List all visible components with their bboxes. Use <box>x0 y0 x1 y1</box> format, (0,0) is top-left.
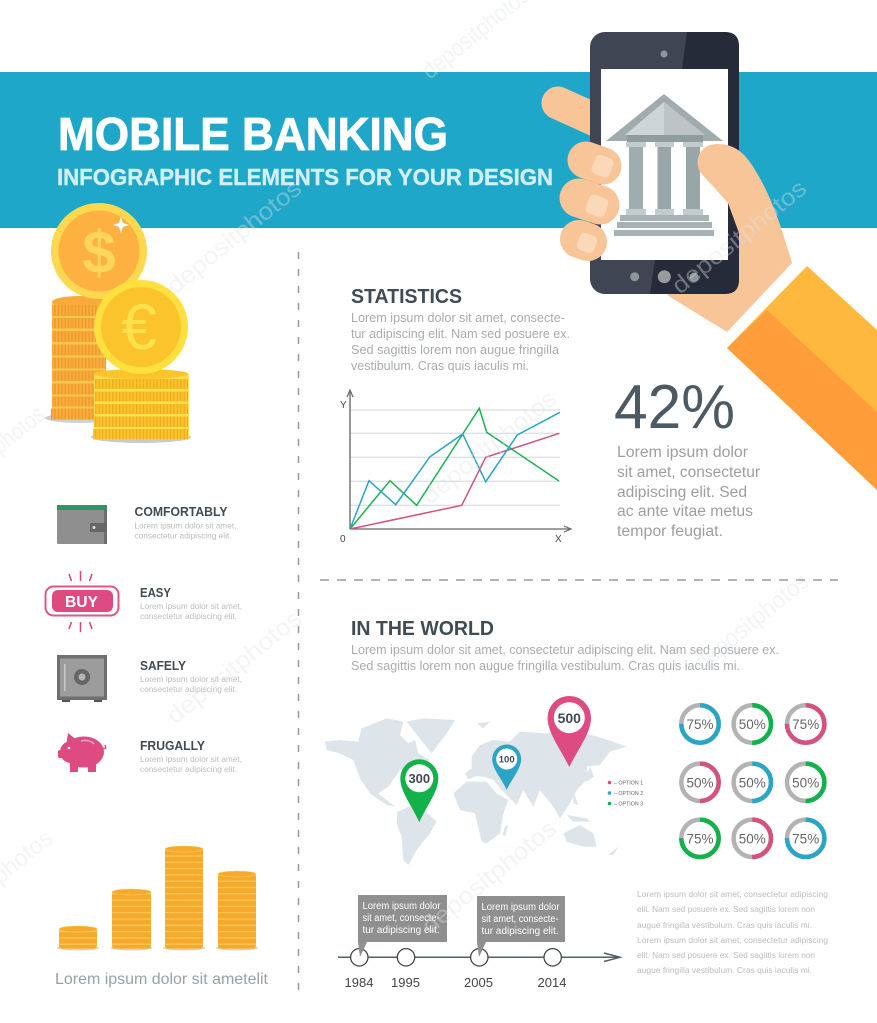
subtitle: INFOGRAPHIC ELEMENTS FOR YOUR DESIGN <box>57 164 553 190</box>
donut: 50% green: 50% <box>739 717 766 732</box>
map pin: 100 <box>492 744 521 790</box>
timeline years: 2014 <box>538 975 566 990</box>
big stat: 42%: sit amet, consectetur <box>617 464 760 481</box>
icon: euro coin <box>94 280 188 374</box>
map pin: 500 <box>548 696 591 767</box>
feature: frugally: FRUGALLY <box>140 738 205 753</box>
divider: vertical <box>298 252 300 992</box>
donut: 75% blue second: 75% <box>792 831 819 846</box>
phone <box>590 32 739 294</box>
icon: coin stacks with dollar and euro <box>45 203 191 443</box>
right text block <box>637 889 828 975</box>
feature: frugally: consectetur adipiscing elit. <box>140 764 237 774</box>
line chart: 0 <box>340 534 346 545</box>
divider: horizontal <box>320 579 838 581</box>
donut: 50% blue <box>734 764 771 801</box>
panel: in the world text <box>351 618 779 673</box>
icon: wallet <box>57 505 107 544</box>
donut: 50% green <box>734 705 771 743</box>
icon: euro coin: € <box>121 291 157 363</box>
big stat: 42% <box>614 373 760 540</box>
line chart: Y <box>340 400 347 411</box>
watermarks: depositphotos <box>162 605 307 730</box>
timeline years: 1995 <box>391 975 420 990</box>
header banner <box>0 72 877 228</box>
feature: frugally <box>58 733 242 774</box>
map legend: – OPTION 3 <box>614 802 643 808</box>
map legend: – OPTION 2 <box>614 791 643 797</box>
icon: dollar coin <box>51 203 147 299</box>
coin bar chart <box>55 846 269 988</box>
icon: thumb and fingers <box>575 144 775 255</box>
feature: safely: Lorem ipsum dolor sit amet, <box>140 674 242 684</box>
donut: 75% pink: 75% <box>792 717 819 732</box>
map legend: – OPTION 1 <box>614 780 643 786</box>
icon: buy button: BUY <box>65 594 98 611</box>
feature: easy <box>46 571 242 632</box>
chart caption: Lorem ipsum dolor sit ametelit <box>55 971 269 988</box>
timeline years <box>345 975 566 990</box>
feature: safely: consectetur adipiscing elit. <box>140 684 237 694</box>
feature: comfortably: consectetur adipiscing elit. <box>134 530 232 540</box>
right text block: elit. Nam sed posuere ex. Sed sagittis lorem non <box>637 904 815 914</box>
timeline callout: second: sit amet, consecte- <box>482 914 558 925</box>
feature: easy: consectetur adipiscing elit. <box>140 611 237 621</box>
feature: easy: Lorem ipsum dolor sit amet, <box>140 601 242 611</box>
icon: dollar coin: $ <box>82 219 116 286</box>
donut: 75% green <box>681 820 719 857</box>
donut: 75% blue: 75% <box>686 717 714 732</box>
feature: safely: SAFELY <box>140 658 186 673</box>
big stat: 42%: tempor feugiat. <box>617 523 723 540</box>
feature: easy: EASY <box>140 585 171 600</box>
watermarks: depositphotos <box>667 175 812 300</box>
donut: 75% green: 75% <box>686 831 714 846</box>
panel: statistics text: Sed sagittis lorem non augue fringilla <box>351 342 560 357</box>
feature: comfortably: Lorem ipsum dolor sit amet, <box>134 520 236 530</box>
right text block: Lorem ipsum dolor sit amet, consectetur adipiscing <box>637 935 828 945</box>
title: MOBILE BANKING <box>58 108 448 160</box>
timeline callout: second: Lorem ipsum dolor <box>482 902 560 913</box>
right text block: elit. Nam sed posuere ex. Sed sagittis lorem non <box>637 950 815 960</box>
timeline callout: second: tur adipiscing elit. <box>482 926 558 937</box>
panel: statistics text <box>351 286 570 373</box>
feature: safely <box>57 655 242 702</box>
right text block: Lorem ipsum dolor sit amet, consectetur adipiscing <box>637 889 828 899</box>
right text block: augue fringilla vestibulum. Cras quis iaculis mi. <box>637 965 812 975</box>
feature: comfortably <box>57 504 236 544</box>
icon: safe <box>57 655 107 702</box>
panel: statistics text: Lorem ipsum dolor sit amet, consecte- <box>351 310 565 325</box>
donut: 50% blue: 50% <box>739 775 766 790</box>
donut: 50% pink <box>681 764 719 801</box>
timeline <box>338 895 620 990</box>
donut: 50% pink: 50% <box>686 775 714 790</box>
timeline callout: first: tur adipiscing elit. <box>362 925 440 936</box>
feature: comfortably: COMFORTABLY <box>134 504 228 519</box>
map pin: 300 <box>400 759 438 822</box>
icon: piggy bank <box>58 733 106 772</box>
watermarks: depositphotos <box>162 175 307 300</box>
map pin: 500: 500 <box>558 710 581 726</box>
timeline callout: first: Lorem ipsum dolor <box>362 901 441 912</box>
donut: 75% pink <box>787 705 824 743</box>
panel: in the world text: Lorem ipsum dolor sit amet, consectetur adipiscing elit. Nam sed posuere ex. <box>351 642 779 657</box>
line chart: X <box>555 534 562 545</box>
panel: statistics text: tur adipiscing elit. Nam sed posuere ex. <box>351 326 570 341</box>
donut: 50% green second <box>787 764 824 801</box>
donut charts <box>681 705 824 857</box>
panel: in the world text: IN THE WORLD <box>351 618 494 640</box>
timeline callout: second <box>477 896 565 957</box>
big stat: 42%: adipiscing elit. Sed <box>617 484 747 501</box>
feature: frugally: Lorem ipsum dolor sit amet, <box>140 754 242 764</box>
icon: bank building <box>606 94 723 236</box>
timeline years: 1984 <box>345 975 373 990</box>
icon: buy button <box>46 571 118 632</box>
timeline callout: first: sit amet, consecte- <box>362 913 440 924</box>
map legend <box>608 780 643 808</box>
panel: in the world text: Sed sagittis lorem non augue fringilla vestibulum. Cras quis iaculis mi. <box>351 658 740 673</box>
donut: 50% green second: 50% <box>792 775 819 790</box>
donut: 50% pink second: 50% <box>739 831 766 846</box>
watermarks: depositphotos <box>417 385 562 510</box>
donut: 75% blue second <box>787 820 824 857</box>
watermarks: depositphotos <box>689 568 815 677</box>
map pin: 100: 100 <box>499 754 515 766</box>
sleeve <box>727 266 877 490</box>
timeline callout: first <box>358 895 447 957</box>
big stat: 42%: 42% <box>614 373 735 442</box>
line chart <box>340 390 571 545</box>
map pin: 300: 300 <box>408 771 430 786</box>
panel: statistics text: vestibulum. Cras quis iaculis mi. <box>351 358 529 373</box>
big stat: 42%: ac ante vitae metus <box>617 503 753 520</box>
hand palm and back finger <box>558 103 792 332</box>
right text block: augue fringilla vestibulum. Cras quis iaculis mi. <box>637 920 812 930</box>
timeline years: 2005 <box>464 975 493 990</box>
donut: 75% blue <box>681 705 719 743</box>
big stat: 42%: Lorem ipsum dolor <box>617 444 748 461</box>
donut: 50% pink second <box>734 820 771 857</box>
watermarks: depositphotos <box>417 815 562 940</box>
world map <box>325 718 627 865</box>
panel: statistics text: STATISTICS <box>351 286 462 308</box>
